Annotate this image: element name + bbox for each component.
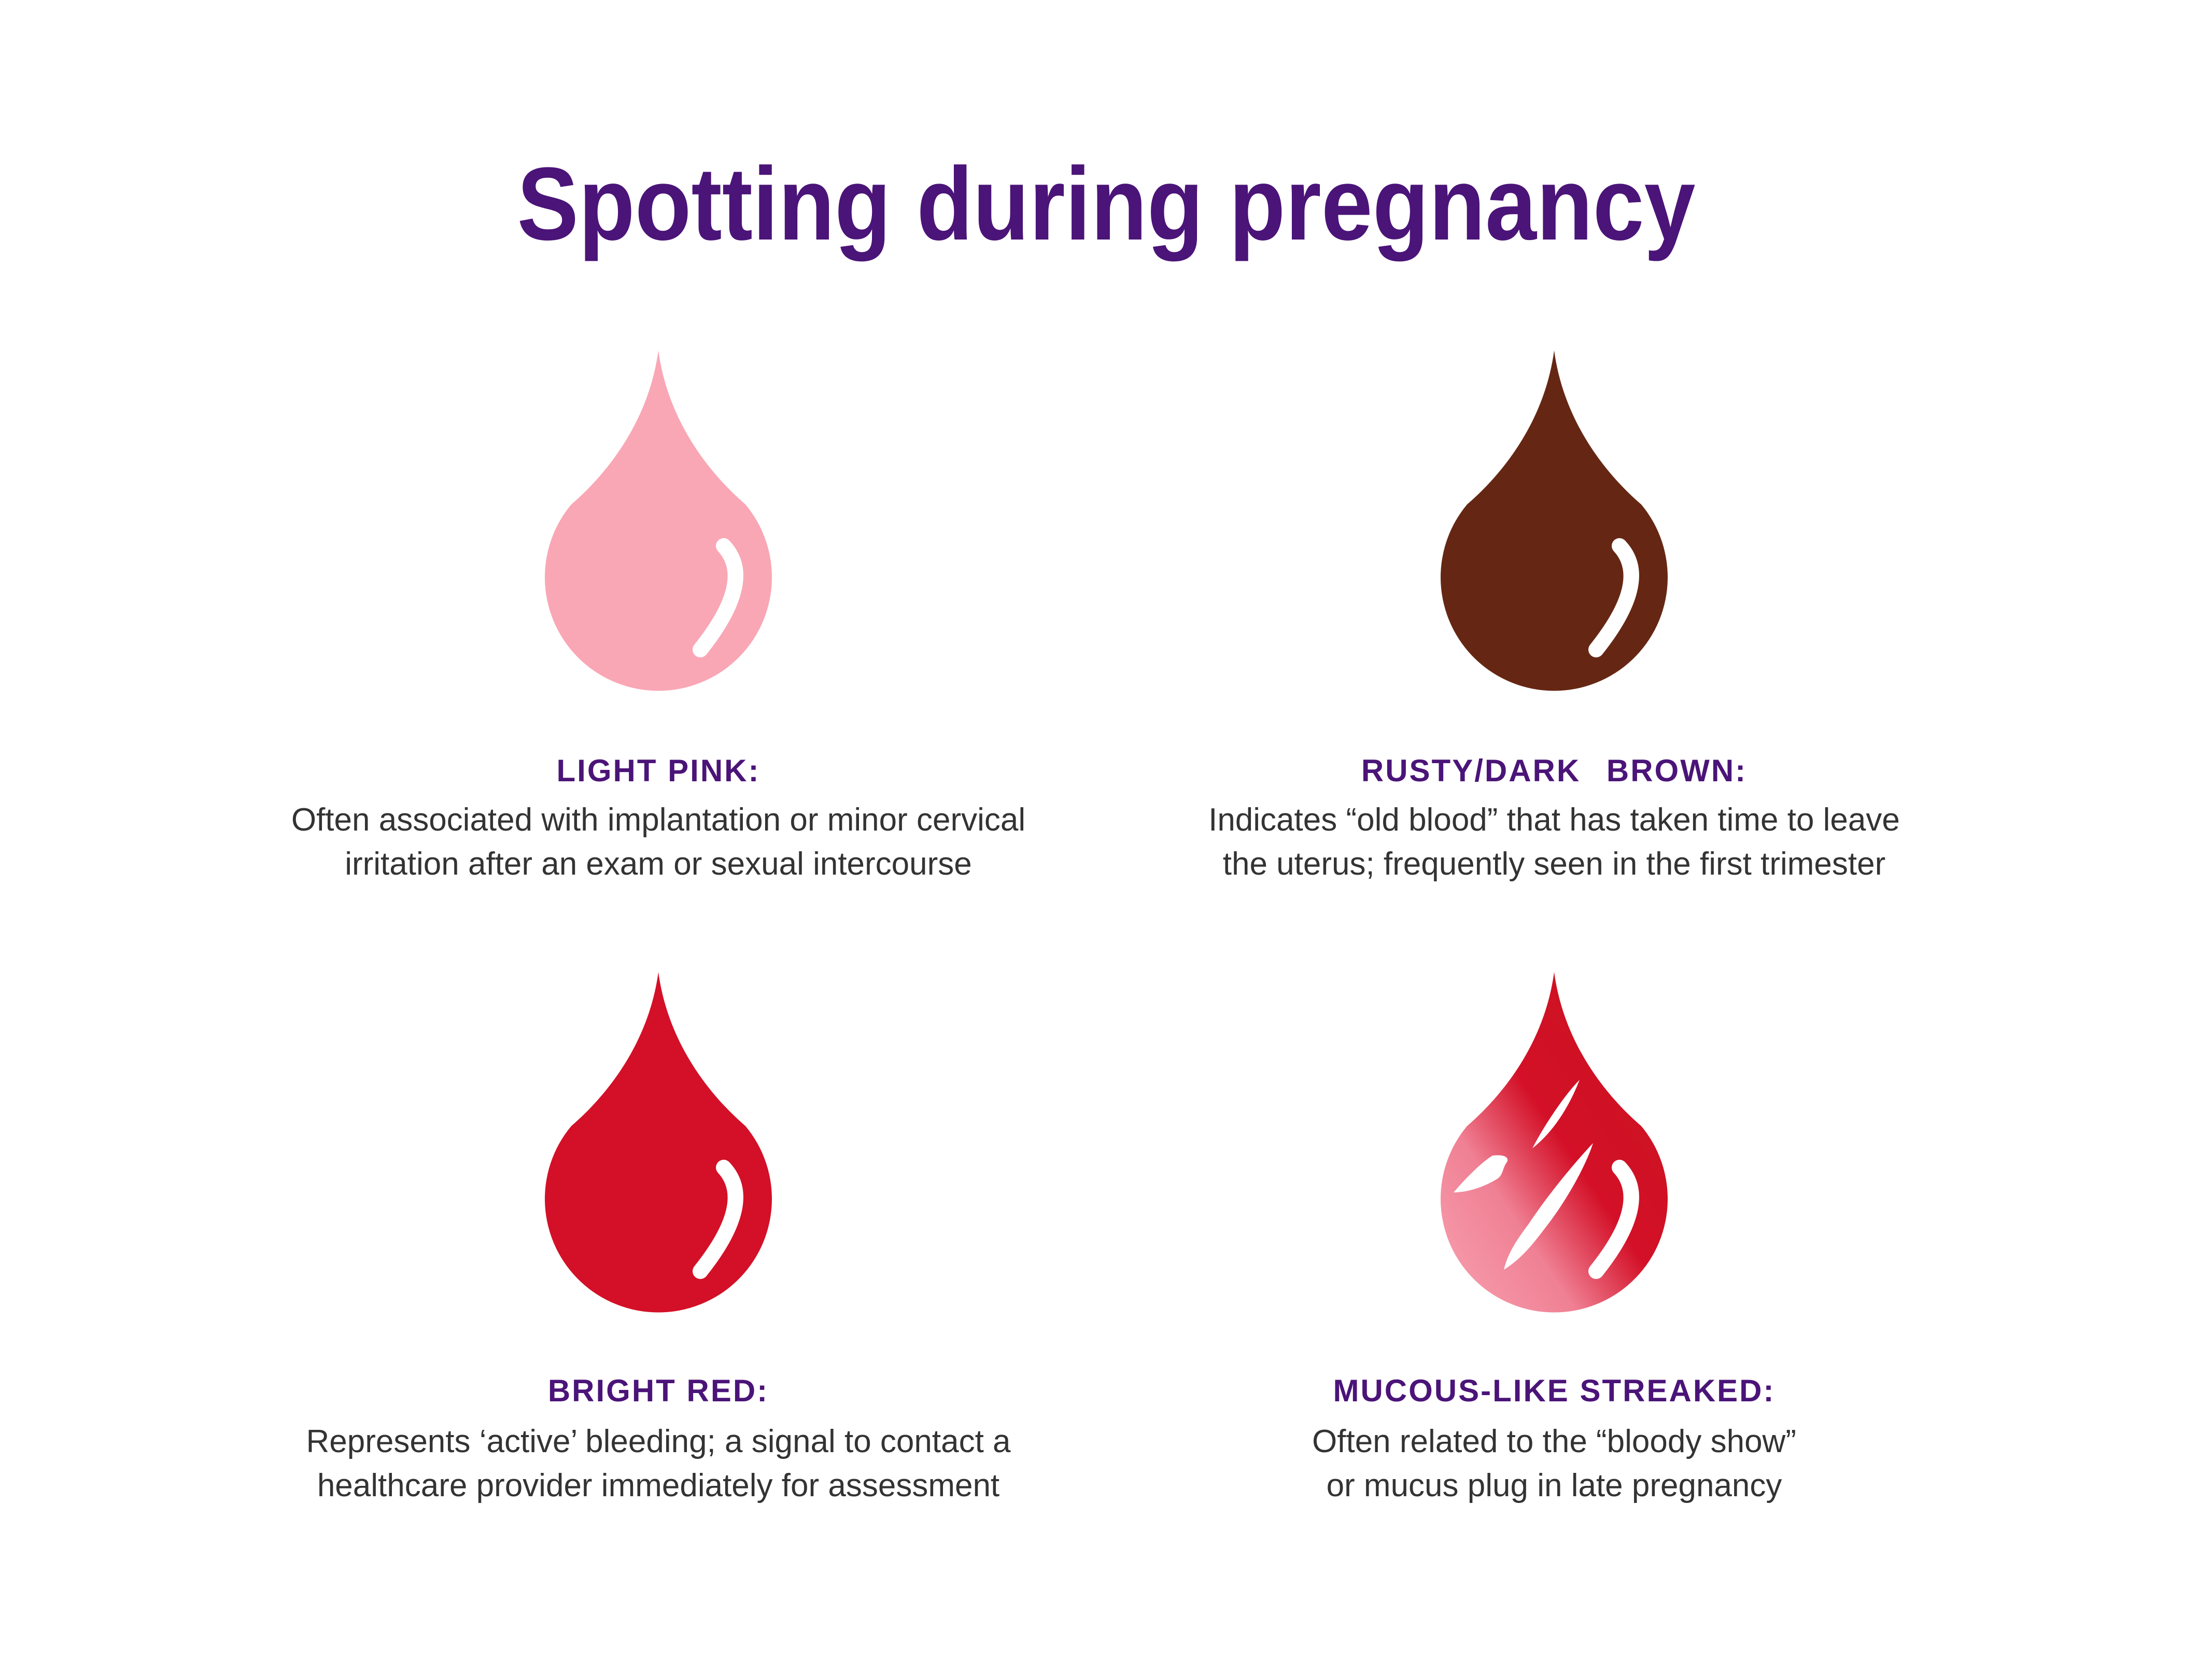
panel: mucous-like streaked bbox=[1312, 972, 1796, 1503]
icon: light pink drop bbox=[545, 350, 772, 691]
text: bright red description: Represents ‘active’ bleeding; a signal to contact a bbox=[306, 1424, 1011, 1459]
heading: rusty/dark brown: RUSTY/DARK BROWN: bbox=[1361, 753, 1747, 788]
panel: rusty/dark brown bbox=[1208, 350, 1900, 882]
text: mucous description: Often related to the “bloody show” bbox=[1312, 1424, 1796, 1459]
text: light pink description: irritation after an exam or sexual intercourse bbox=[345, 846, 972, 882]
heading: mucous-like streaked: MUCOUS-LIKE STREAKED: bbox=[1333, 1373, 1775, 1408]
heading: light pink: LIGHT PINK: bbox=[557, 753, 760, 788]
panel: light pink bbox=[291, 350, 1025, 882]
title: Spotting during pregnancy bbox=[517, 146, 1695, 262]
text: brown description: Indicates “old blood” that has taken time to leave bbox=[1208, 802, 1900, 838]
text: mucous description: or mucus plug in late pregnancy bbox=[1327, 1468, 1782, 1503]
text: brown description: the uterus; frequently seen in the first trimester bbox=[1223, 846, 1885, 882]
heading: bright red: BRIGHT RED: bbox=[548, 1373, 769, 1408]
icon: brown drop bbox=[1441, 350, 1668, 691]
icon: streaked drop bbox=[1441, 972, 1668, 1312]
text: light pink description: Often associated with implantation or minor cervical bbox=[291, 802, 1025, 838]
panel: bright red bbox=[306, 972, 1011, 1503]
text: bright red description: healthcare provider immediately for assessment bbox=[317, 1468, 999, 1503]
icon: red drop bbox=[545, 972, 772, 1312]
